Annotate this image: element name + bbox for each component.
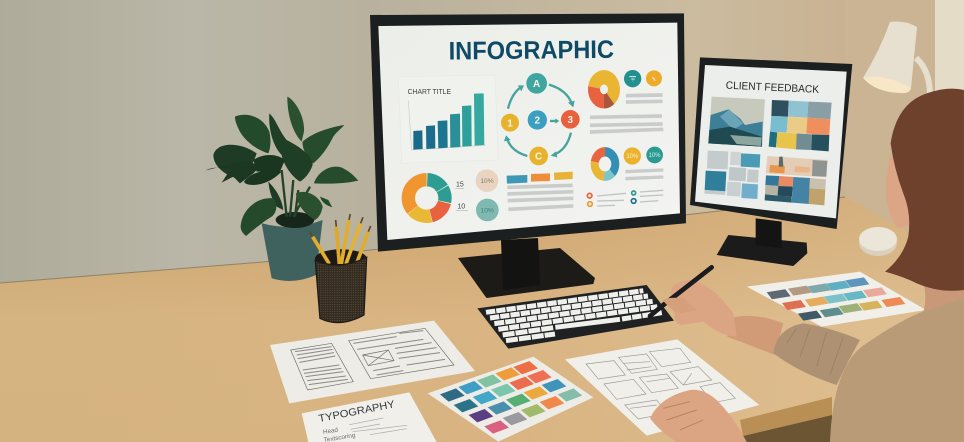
colour palette sheet [747,272,926,327]
typography samples [323,418,407,442]
typography heading: TYPOGRAPHY [318,399,396,425]
donut chart right [590,147,620,181]
plant leaves [205,97,358,236]
pencils [309,214,371,264]
chart card [398,75,498,163]
stat numbers: 15 [456,181,464,188]
desk lamp [859,22,930,256]
mesh pencil cup [315,257,367,323]
colour swatches [440,361,582,434]
wireframe page layout [349,328,454,379]
second monitor stand [717,218,807,266]
stat numbers: 10 [457,203,465,210]
face [886,157,920,228]
lamp base [859,227,897,256]
process cycle diagram: A [533,79,540,90]
lamp shade [863,22,917,88]
typography sheet [302,392,437,442]
wireframe column [291,343,353,390]
sketched wireframes [586,348,735,419]
desk [0,197,964,442]
grey and blue tile [704,151,760,199]
plant pot [262,220,323,281]
infographic title: INFOGRAPHIC [449,36,614,66]
donut chart bottom left [401,172,452,224]
keyboard keys [486,291,662,341]
keyboard [477,285,674,349]
mountain landscape tile [708,97,765,147]
designer person [650,89,964,442]
sweater body [830,295,964,442]
second monitor screen [695,65,847,218]
percent badges bottom: 10% [480,178,494,185]
colour block tile [769,100,832,151]
monitor stand [458,238,595,298]
text lines top right [590,95,663,132]
palette swatches [767,277,905,321]
colour swatch sheet [428,357,593,442]
client feedback heading: CLIENT FEEDBACK [726,80,819,96]
text lines and legend right [587,170,663,206]
sweater sleeve [773,323,860,385]
percent badges right: 10% [626,154,639,160]
hair [885,89,964,291]
lamp arm [916,58,930,96]
process cycle diagram: C [535,152,542,163]
icon circles top right [624,70,662,87]
lower hand on sheet [650,390,747,442]
wireframe sketch sheet [565,339,759,436]
left wireframe sheet [270,321,475,403]
forearm [727,316,783,355]
colour legend bars and text lines [507,172,573,209]
bar chart [413,93,484,150]
typography samples: Head [323,427,339,436]
pen [650,267,712,316]
photo collage tile [765,156,828,205]
percent badges right [624,147,663,165]
process cycle diagram: 2 [535,116,541,127]
percent badges right: 10% [649,153,661,159]
wall [0,0,964,300]
chart title: CHART TITLE [408,87,451,96]
neck [923,280,964,312]
main monitor [370,13,686,298]
process cycle diagram: 1 [507,118,513,129]
percent badges bottom: 10% [481,207,494,214]
process cycle diagram: 3 [568,115,574,126]
plant and pencil cup [205,97,371,323]
pie chart top right [593,76,615,103]
monitor screen [378,23,680,240]
writing hand [670,280,737,337]
second monitor bezel [690,57,852,229]
client feedback monitor [690,57,852,266]
index finger [663,298,697,313]
lamp glow [863,77,911,93]
process cycle diagram [501,73,580,165]
percent badges bottom [476,169,499,221]
cup back rim [315,249,367,268]
monitor bezel [370,13,686,252]
stat numbers [455,181,468,211]
